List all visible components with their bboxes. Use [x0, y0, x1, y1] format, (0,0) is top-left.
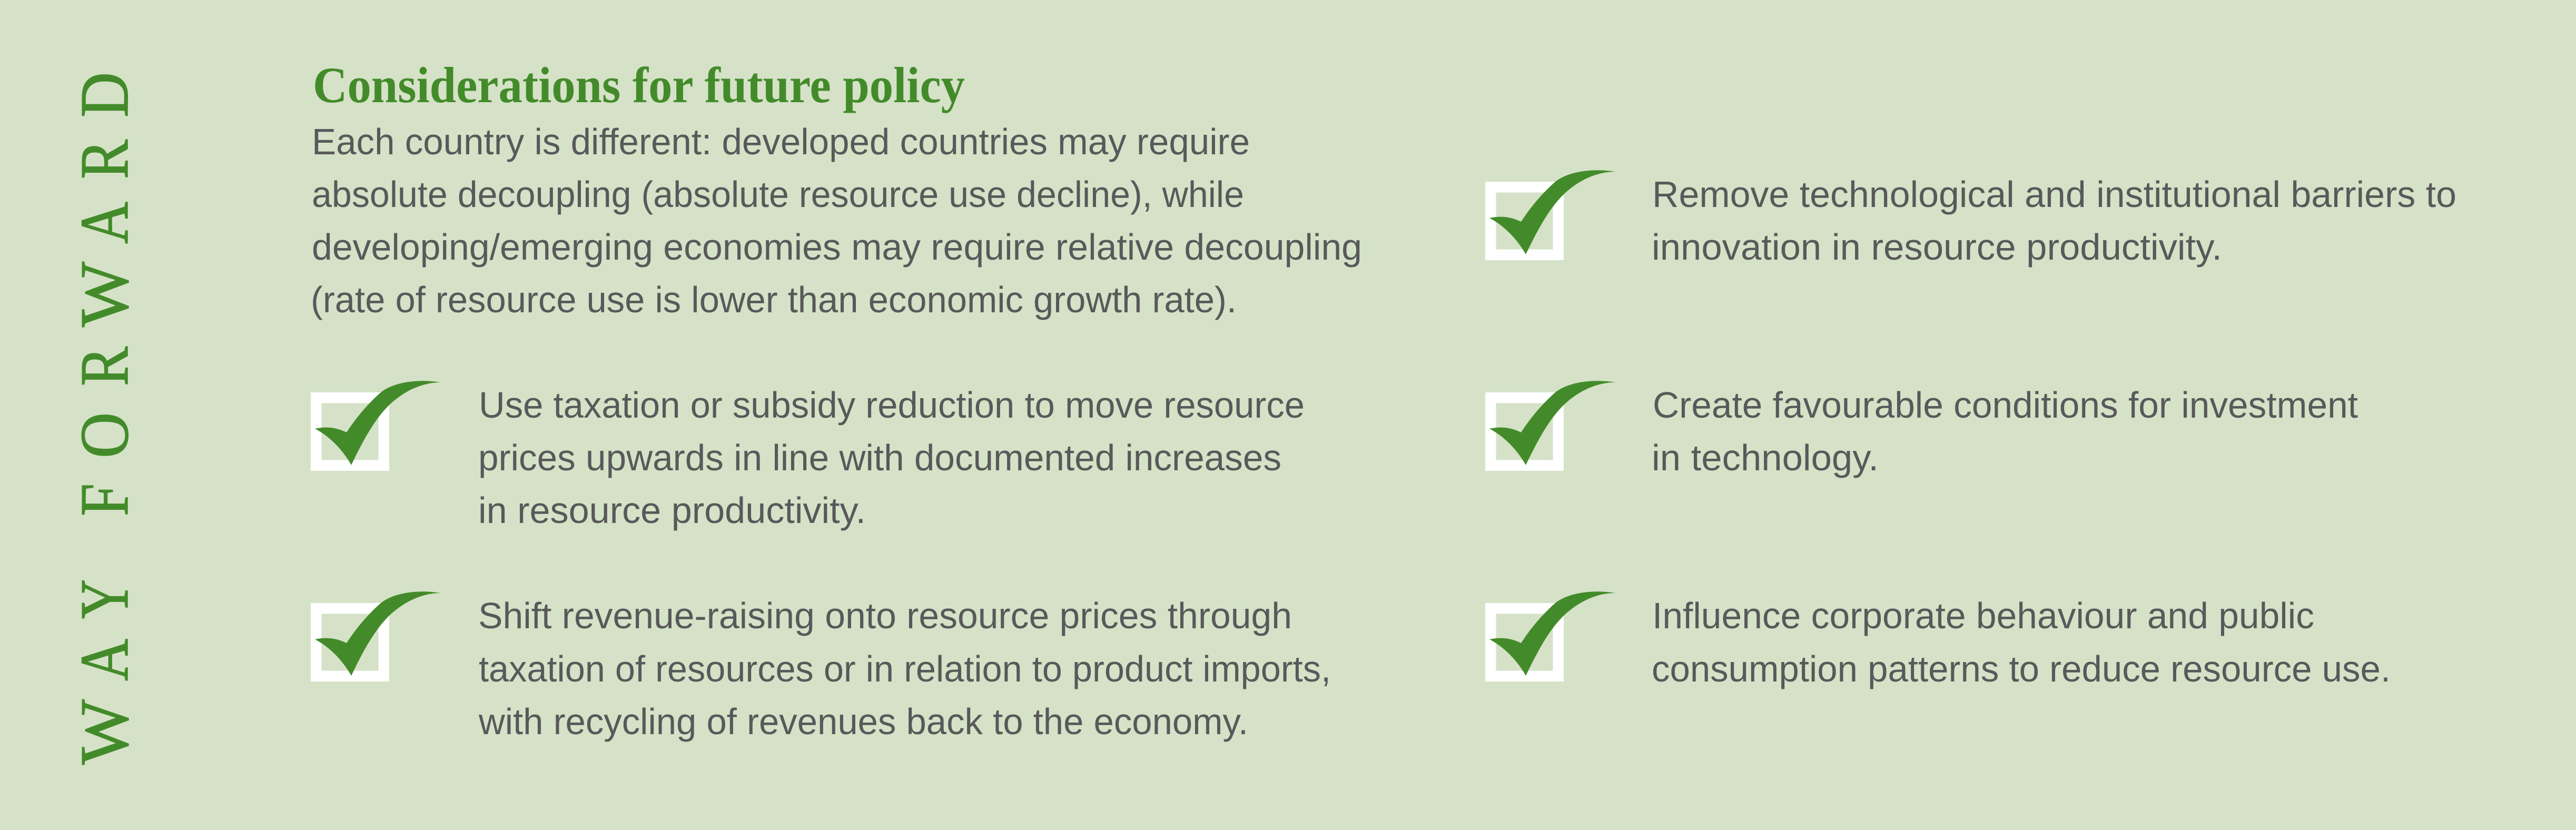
icon: checkbox with tick: [315, 591, 441, 676]
item: taxation or subsidy reduction: [315, 381, 1305, 531]
intro text block: developing/emerging economies may require relative decoupling: [312, 226, 1362, 268]
text: influence corporate behaviour: consumption patterns to reduce resource use.: [1652, 648, 2391, 689]
vertical side title: WAY FORWARD: A: [66, 639, 143, 681]
text: influence corporate behaviour: Influence corporate behaviour and public: [1652, 595, 2314, 636]
vertical side title: WAY FORWARD: F: [66, 483, 143, 516]
vertical side title: WAY FORWARD: R: [66, 139, 143, 179]
vertical side title: WAY FORWARD: D: [66, 72, 143, 117]
item: influence corporate behaviour: [1489, 591, 2391, 689]
item: favourable conditions: [1489, 381, 2358, 478]
vertical side title: WAY FORWARD: W: [66, 262, 143, 327]
heading: considerations for future policy: Considerations for future policy: [313, 57, 965, 113]
intro text block: Each country is different: developed countries may require: [312, 121, 1250, 162]
intro text block: absolute decoupling (absolute resource use decline), while: [312, 174, 1244, 215]
icon: checkbox with tick: [1489, 591, 1615, 676]
text: shift revenue-raising: Shift revenue-raising onto resource prices through: [478, 595, 1292, 636]
icon: checkbox with tick: [1489, 381, 1615, 466]
text: favourable conditions: in technology.: [1652, 437, 1879, 478]
text: remove barriers: [1652, 174, 2456, 268]
text: shift revenue-raising: [478, 595, 1331, 742]
intro text block: [311, 121, 1362, 320]
intro text block: (rate of resource use is lower than economic growth rate).: [311, 279, 1237, 320]
text: remove barriers: innovation in resource productivity.: [1652, 226, 2222, 268]
vertical side title: WAY FORWARD: R: [66, 346, 143, 386]
text: favourable conditions: Create favourable conditions for investment: [1653, 384, 2358, 426]
text: taxation or subsidy reduction: prices upwards in line with documented increases: [478, 437, 1281, 478]
text: taxation or subsidy reduction: Use taxation or subsidy reduction to move resource: [479, 384, 1305, 426]
vertical side title: WAY FORWARD: A: [66, 202, 143, 244]
text: remove barriers: Remove technological and institutional barriers to: [1652, 174, 2456, 215]
text: taxation or subsidy reduction: [478, 384, 1305, 531]
vertical side title: WAY FORWARD: O: [66, 412, 143, 458]
text: favourable conditions: [1652, 384, 2358, 478]
vertical side title: WAY FORWARD: Y: [66, 579, 143, 619]
text: shift revenue-raising: taxation of resources or in relation to product imports,: [479, 648, 1331, 689]
vertical side title: WAY FORWARD: W: [66, 699, 143, 765]
icon: checkbox with tick: [1489, 170, 1615, 255]
text: taxation or subsidy reduction: in resource productivity.: [478, 490, 866, 531]
icon: checkbox with tick: [315, 381, 441, 466]
item: shift revenue-raising: [315, 591, 1331, 742]
text: influence corporate behaviour: [1652, 595, 2391, 689]
text: shift revenue-raising: with recycling of revenues back to the economy.: [478, 701, 1248, 742]
item: remove barriers: [1489, 170, 2456, 268]
